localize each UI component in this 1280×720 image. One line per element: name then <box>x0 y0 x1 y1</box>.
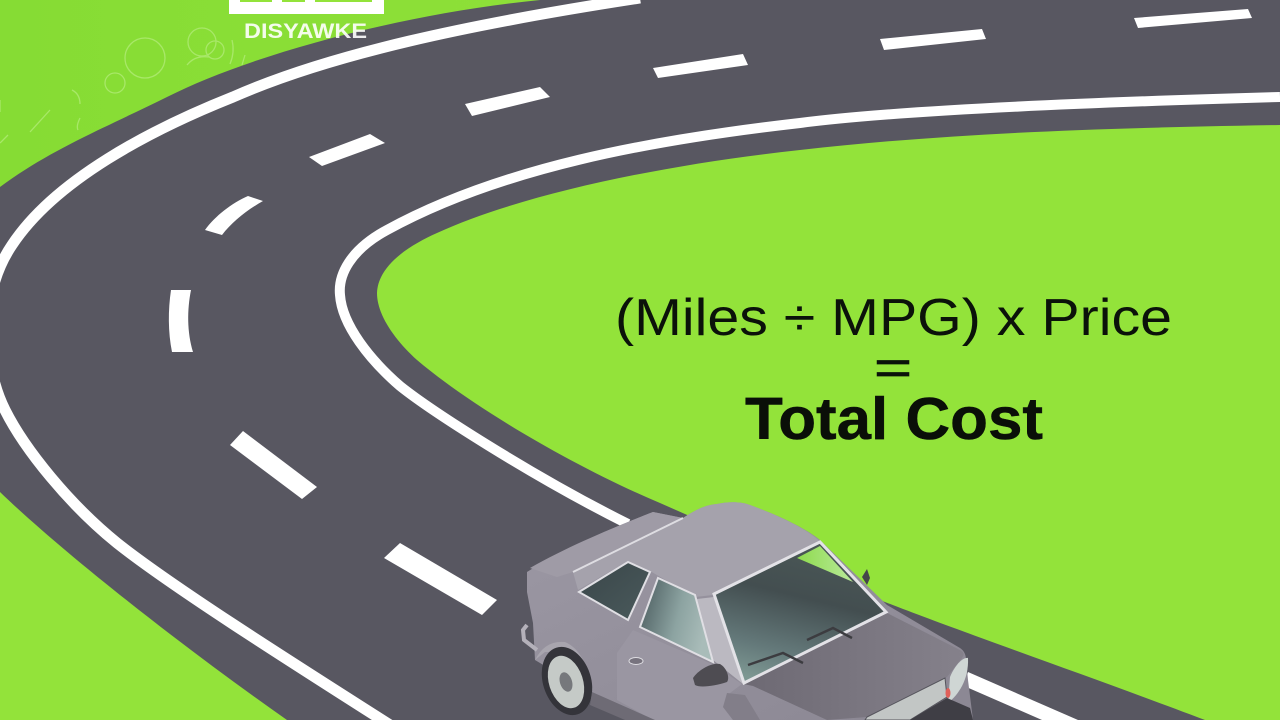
road: inner white edge line <box>340 97 1280 524</box>
wipers <box>748 628 852 665</box>
rear wheel <box>533 640 601 720</box>
door handle <box>629 658 643 664</box>
far mirror <box>862 569 870 585</box>
result text: Total Cost <box>745 386 1043 452</box>
A pillar <box>697 597 743 684</box>
headlight <box>948 658 968 703</box>
windscreen <box>714 542 886 683</box>
doodles: faint tree outlines <box>0 28 245 143</box>
car hood <box>743 613 964 720</box>
rear window <box>579 562 650 620</box>
car <box>523 502 973 720</box>
equals sign: = <box>874 341 912 395</box>
side sill <box>590 692 655 720</box>
grille <box>865 678 947 720</box>
front door window <box>640 578 713 662</box>
front lower panel <box>910 698 973 720</box>
fender shadow <box>723 693 760 720</box>
rear bumper <box>523 625 537 650</box>
roof seam <box>573 518 683 572</box>
car body <box>527 502 973 720</box>
wheel arch <box>535 642 593 690</box>
car trunk <box>530 512 683 577</box>
road: outer white edge line <box>0 0 640 720</box>
indicator <box>946 688 950 698</box>
sign label: DISYAWKE <box>244 20 367 43</box>
background: darker top-left field <box>0 0 560 200</box>
door panel <box>617 630 742 720</box>
car roof <box>573 502 820 597</box>
formula text <box>615 289 1172 452</box>
road: centre dashes <box>169 9 1252 615</box>
wing mirror <box>693 664 728 686</box>
windscreen reflection <box>797 546 853 582</box>
road: inner white line after car <box>964 672 1078 720</box>
sign fragment <box>229 0 384 43</box>
formula line: (Miles ÷ MPG) x Price <box>615 289 1172 347</box>
